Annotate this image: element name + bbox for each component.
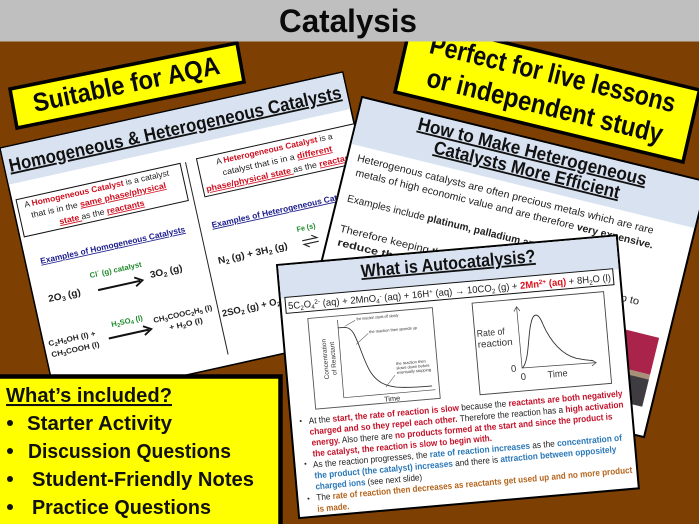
body text (335, 153, 658, 322)
list item: practice questions: Practice Questions (32, 496, 211, 519)
chart: concentration of reactant against time: Concentration (321, 338, 331, 380)
list item: student-friendly notes: Student-Friendly Notes (32, 468, 254, 491)
equation: Haber process (214, 221, 320, 268)
bullet notes: is made. (317, 501, 350, 514)
equation: esterification: C (48, 338, 55, 348)
list item: starter activity: Starter Activity (27, 412, 173, 435)
title bar: Catalysis (279, 3, 417, 39)
definition box: heterogeneous: phase/physical state as the reactants (205, 150, 359, 194)
equation: esterification: 5 (199, 309, 204, 316)
equation: esterification: H (57, 336, 64, 346)
reaction equation: O (303, 299, 312, 311)
heading: Homogeneous & Heterogeneous Catalysts (7, 82, 343, 176)
equation: esterification: COOC (167, 308, 192, 322)
chart: concentration of reactant against time: the reaction then (396, 358, 426, 366)
bullet notes: energy. Also there are no products formed at the start and since the product is (311, 411, 613, 448)
equation: esterification: 3 (63, 352, 67, 358)
equation: esterification: COOH (l) (65, 340, 101, 356)
panel: what's included (0, 376, 280, 524)
equation: esterification: (l) (202, 303, 214, 314)
body text: Examples include platinum, palladium and rhodium. (346, 194, 587, 263)
title bar (0, 0, 699, 42)
equation: Haber process: N (217, 255, 226, 267)
reaction equation: + (429, 289, 433, 296)
body text: metals of high economic value and are therefore very expensive. (354, 168, 654, 252)
bullet notes: the catalyst, the reaction is slow to begin with. (312, 433, 492, 459)
equation: ozone decomposition: Cl˙ (g) catalyst (89, 260, 143, 280)
bullet notes: the product (the catalyst) increases and there is attraction between oppositely (314, 444, 617, 481)
heading: Catalysts More Efficient (432, 136, 622, 202)
reaction equation: 2 (300, 305, 305, 312)
equation: esterification: 2 (191, 311, 195, 318)
equation: contact process: (g) + O (243, 297, 278, 315)
equation: Haber process: Fe (s) (296, 221, 317, 234)
equation: esterification: SO (119, 316, 132, 327)
reaction equation: + 8H (566, 275, 590, 288)
banner: perfect for live lessons: or independent study (424, 63, 666, 149)
definition box: homogeneous: that is in the same phase/physical (30, 180, 167, 220)
chart: concentration of reactant against time: of Reactant (329, 341, 339, 375)
reaction equation: 2- (314, 298, 320, 306)
chart: rate of reaction against time: Time (547, 368, 568, 381)
reaction equation: (g) + (495, 281, 521, 294)
bullet notes: At the start, the rate of reaction is slow because the reactants are both negatively (308, 388, 623, 426)
definition box: homogeneous (16, 163, 188, 237)
equation: Haber process: (g) (271, 241, 289, 255)
reaction equation: (aq) (546, 277, 567, 290)
divider (185, 162, 228, 355)
equation: esterification: 5 (63, 340, 68, 346)
chart: concentration of reactant against time: the reaction then speeds up (369, 325, 418, 334)
equation: esterification: H (193, 306, 200, 316)
reaction equation (285, 269, 614, 313)
bullet notes: As the reaction progresses, the rate of reaction increases as the concentration of (313, 433, 623, 470)
examples heading: homogeneous: Examples of Homogeneous Catalysts (39, 224, 186, 266)
panel: homogeneous and heterogeneous catalysts (0, 72, 399, 404)
chart: concentration of reactant against time: Time (384, 395, 401, 404)
definition box: heterogeneous: A Heterogeneous Catalyst is a (215, 131, 334, 166)
equation: ozone decomposition: 3 (61, 295, 67, 303)
chart: rate of reaction against time (472, 292, 612, 395)
body text: reduce their overall cost. (336, 238, 485, 284)
equation: esterification: O (l) (185, 316, 204, 328)
equation: esterification: + H (168, 321, 182, 332)
equation: Haber process: (g) + 3H (228, 245, 270, 264)
reaction equation: 2 (492, 288, 496, 295)
panel: what is autocatalysis (277, 235, 639, 518)
reaction equation: - (379, 293, 382, 300)
banner: perfect for live lessons (395, 20, 699, 162)
equation: esterification: 3 (165, 317, 169, 324)
heading: What is Autocatalysis? (360, 246, 536, 281)
reaction equation: 4 (376, 298, 381, 305)
heading: what's included: What’s included? (6, 384, 172, 407)
equation: esterification: 2 (54, 342, 59, 348)
body text: Heterogenous catalysts are often precious metals which are rare (356, 153, 655, 237)
bullet notes: charged and so they repel each other. Therefore the reaction has a high activation (309, 399, 624, 437)
reaction equation: O (l) (592, 273, 611, 286)
equation: esterification: (l) (133, 313, 144, 324)
panel: making heterogeneous catalysts more efficient (299, 97, 699, 437)
reaction equation: (aq) + 2MnO (320, 293, 377, 309)
chart: concentration of reactant against time: slows down before (396, 363, 430, 370)
definition box: homogeneous: state as the reactants (58, 198, 146, 226)
reaction equation: 2Mn (520, 279, 540, 292)
equation: contact process: 2 (276, 301, 282, 309)
reaction equation: 4 (311, 304, 316, 311)
equation: contact process: 2SO (221, 305, 242, 320)
body text: Therefore keeping the amount of catalyst used low will help to (339, 224, 641, 308)
equation: ozone decomposition: 2O (47, 291, 62, 305)
bullet notes: charged ions (see next slide) (315, 472, 422, 491)
chart: rate of reaction against time: reaction (477, 337, 513, 351)
equation: esterification: CH (152, 314, 165, 325)
equation: ozone decomposition: (g) (166, 263, 184, 277)
definition box: heterogeneous (196, 124, 363, 197)
chart: rate of reaction against time: 0 (520, 372, 527, 383)
chart: rate of reaction against time: 0 (511, 364, 517, 375)
equation: esterification: CH (50, 348, 63, 359)
banner: suitable for AQA: Suitable for AQA (30, 50, 222, 118)
equation: contact process: 2 (241, 309, 246, 317)
definition box: heterogeneous: catalyst that is in a different (221, 143, 333, 177)
reaction equation: (aq) → 10CO (432, 283, 493, 300)
reaction equation: (aq) + 16H (381, 289, 430, 304)
chart: concentration of reactant against time (308, 308, 440, 410)
equation: esterification: OH (l) + (66, 329, 97, 344)
list item: discussion questions: Discussion Questions (28, 440, 231, 463)
examples heading: heterogeneous: Examples of Heterogeneous Catalysts (211, 187, 362, 230)
reaction equation: 2 (589, 280, 593, 287)
equation: esterification: 2 (183, 324, 187, 331)
equation: esterification (46, 298, 216, 361)
reaction equation: 2+ (539, 279, 547, 286)
equation: Haber process: 2 (268, 249, 274, 257)
equation: esterification: 2 (117, 323, 121, 329)
bullet notes: The rate of reaction then decreases as reactants get used up and no more product (316, 465, 633, 502)
equation: Haber process: 2 (225, 258, 231, 266)
reaction equation: 5C (288, 300, 301, 312)
equation: ozone decomposition: 2 (163, 271, 169, 279)
bullet notes (299, 388, 634, 515)
heading: How to Make Heterogeneous (416, 113, 649, 189)
photo: catalyst (539, 313, 659, 407)
equation: esterification: 4 (130, 319, 136, 326)
definition box: homogeneous: A Homogeneous Catalyst is a catalyst (23, 168, 171, 209)
equation: esterification: H (110, 319, 118, 329)
equation: ozone decomposition: 3O (149, 267, 164, 281)
equation: ozone decomposition: (g) (64, 287, 82, 301)
chart: concentration of reactant against time: eventually stopping (397, 367, 431, 375)
chart: concentration of reactant against time: the reaction starts off slowly (356, 313, 399, 321)
chart: rate of reaction against time: Rate of (476, 326, 505, 340)
equation: ozone decomposition (44, 251, 184, 306)
